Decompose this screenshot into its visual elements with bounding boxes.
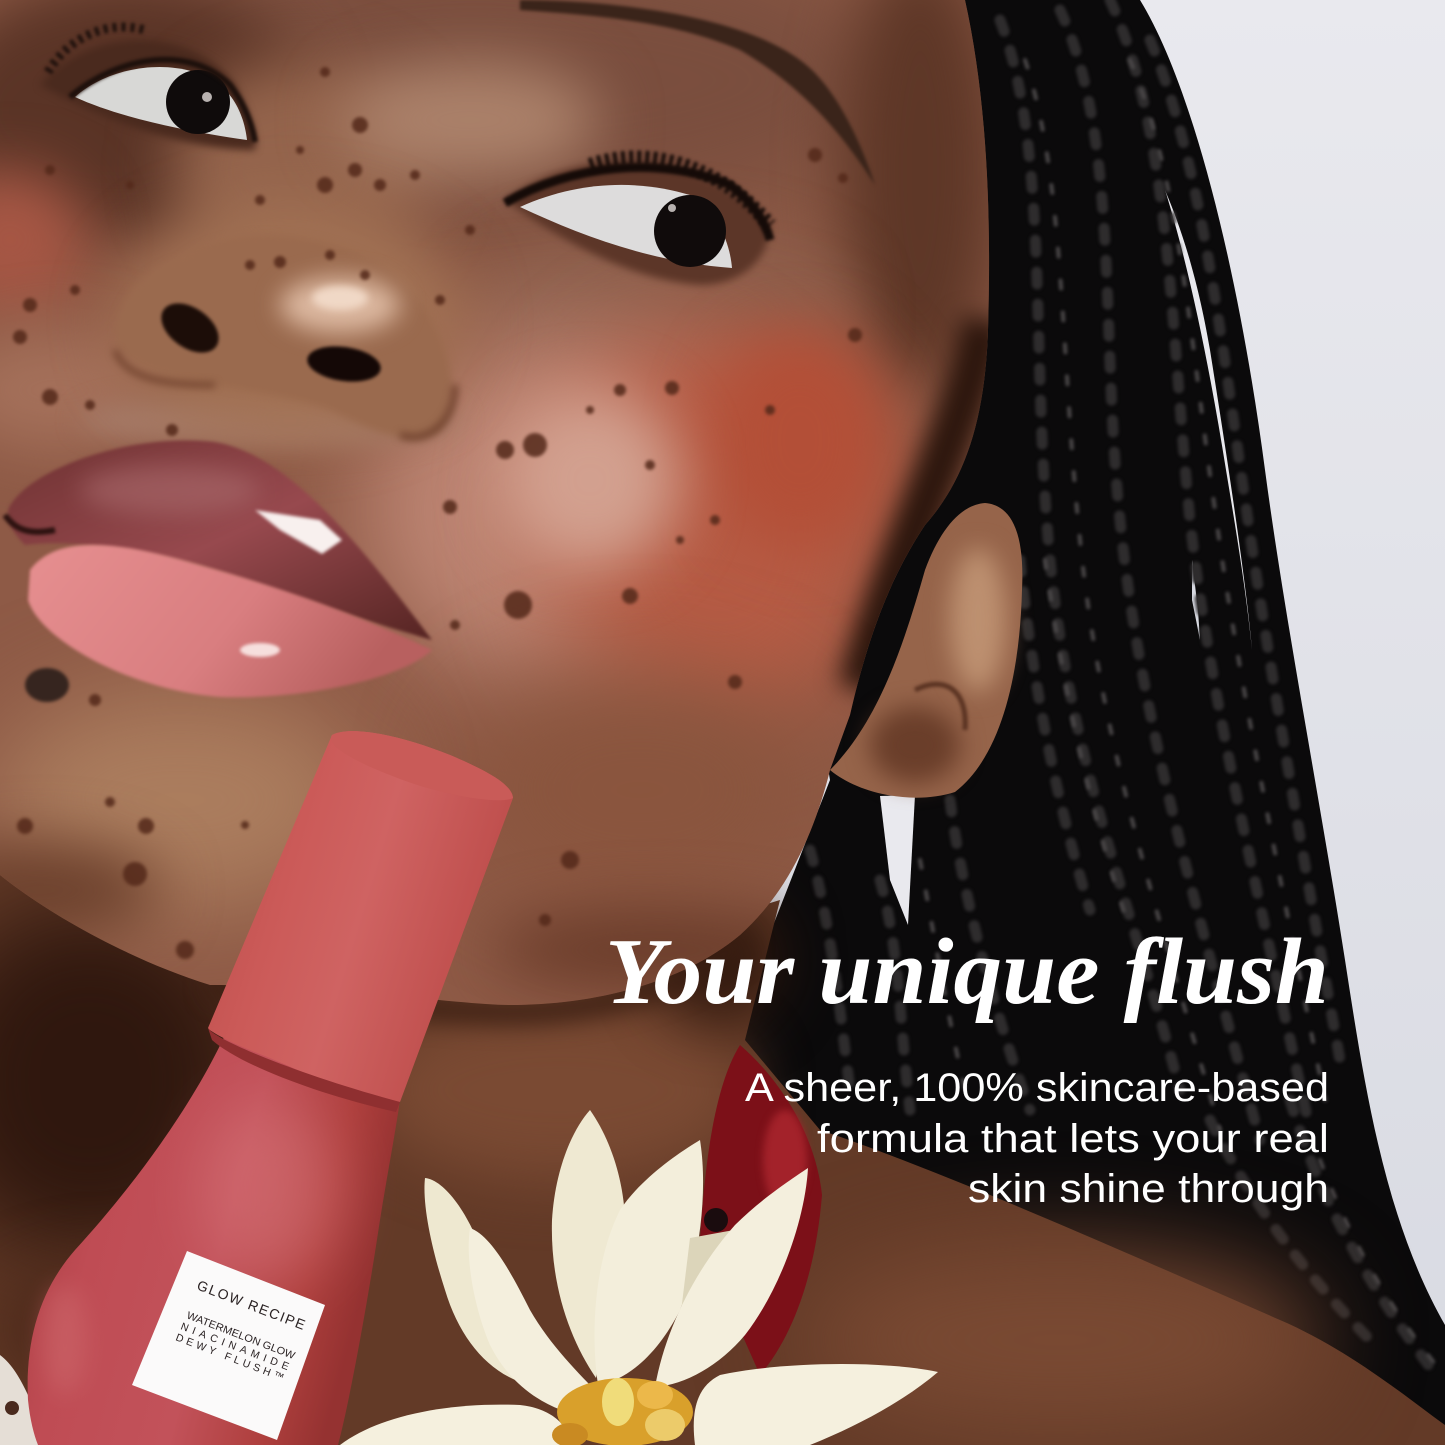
product label: WATERMELON GLOW bbox=[185, 1310, 297, 1362]
nose bbox=[115, 205, 465, 438]
lower lip bbox=[28, 545, 432, 697]
ear bbox=[830, 503, 1022, 798]
flower centre bbox=[552, 1378, 693, 1445]
product label: NIACINAMIDE bbox=[179, 1321, 291, 1373]
face shading bbox=[0, 0, 1000, 990]
left eye bbox=[40, 27, 256, 150]
upper lip bbox=[8, 440, 432, 640]
bottle body bbox=[28, 1035, 400, 1445]
description text bbox=[745, 1066, 1329, 1211]
petals bbox=[424, 1178, 530, 1385]
description text: formula that lets your real bbox=[817, 1117, 1329, 1161]
braid texture bbox=[810, 0, 1440, 1380]
product label: GLOW RECIPE bbox=[195, 1277, 309, 1333]
flower bbox=[340, 1110, 938, 1445]
description text: skin shine through bbox=[968, 1167, 1329, 1211]
face bbox=[0, 0, 1030, 1010]
freckles bbox=[13, 67, 862, 959]
description text: A sheer, 100% skincare-based bbox=[745, 1066, 1329, 1110]
red beaded necklace bbox=[700, 1045, 822, 1375]
product label: DEWY FLUSH™ bbox=[174, 1332, 286, 1384]
lip highlights bbox=[5, 465, 342, 657]
eyebrow bbox=[520, 0, 875, 185]
title: Your unique flush bbox=[605, 920, 1329, 1024]
product bottle bbox=[28, 731, 513, 1445]
neck and shoulder skin bbox=[0, 860, 1445, 1445]
product label bbox=[132, 1251, 325, 1440]
bottle cap bbox=[208, 731, 513, 1102]
lace edge bbox=[0, 1355, 50, 1445]
right eye bbox=[505, 158, 770, 285]
hair braids bbox=[700, 0, 1445, 1445]
mole bbox=[25, 668, 69, 702]
